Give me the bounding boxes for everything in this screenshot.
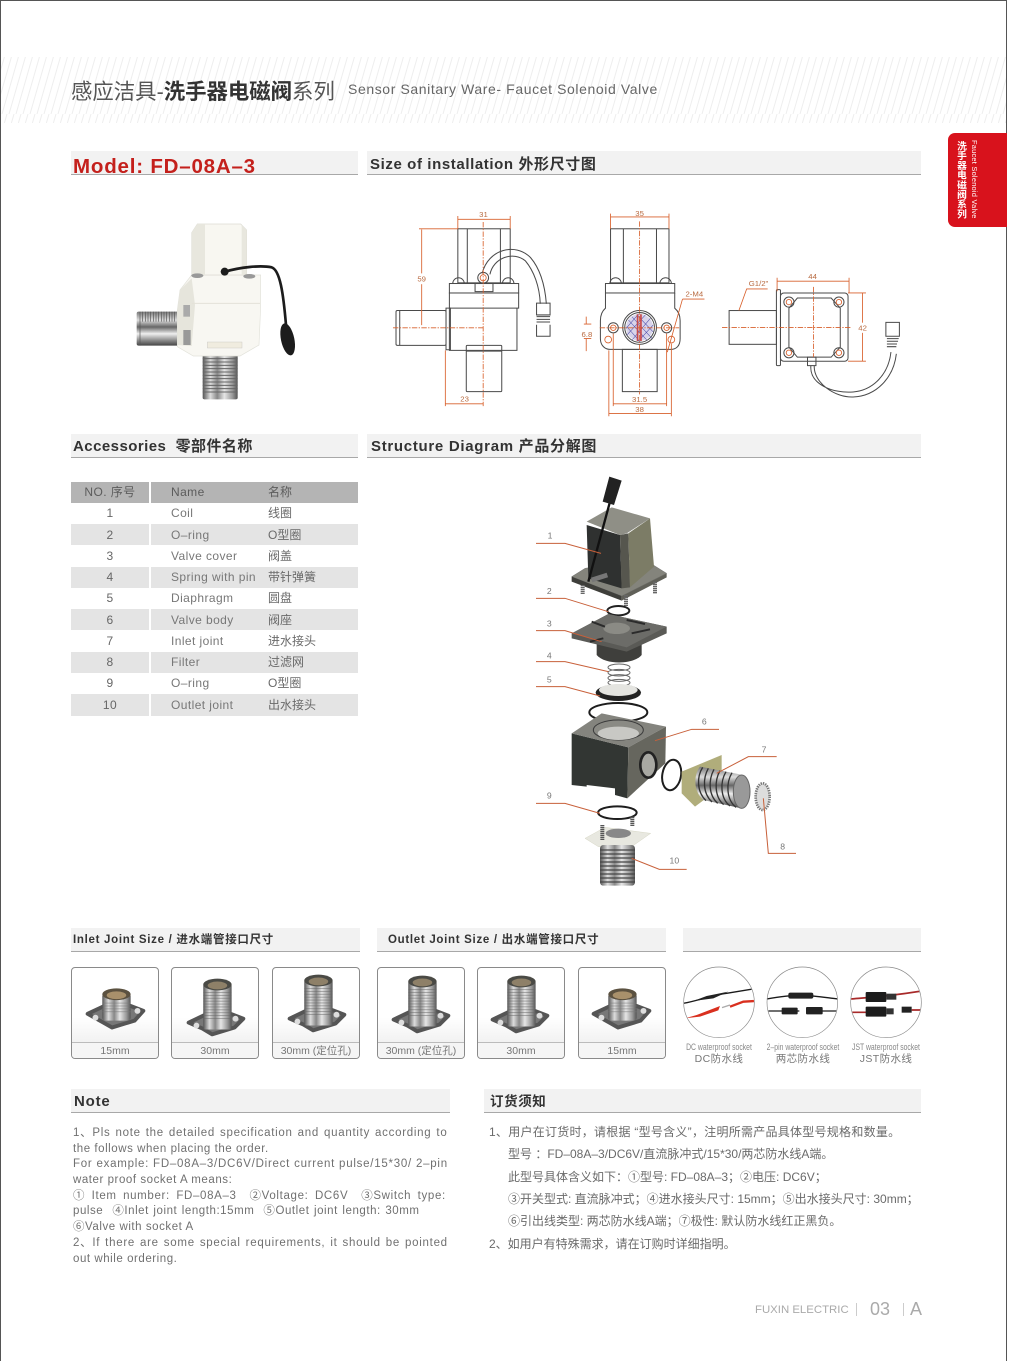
dimension labels [416, 209, 868, 414]
heading: size of installation [367, 151, 921, 175]
table column 1: 3 [106, 549, 114, 563]
tab Chinese text: 洗手器电磁阀系列 [955, 141, 966, 219]
text block: Chinese note [489, 1125, 919, 1251]
table column 3: O型圈 [268, 528, 301, 542]
caption: DC socket Chinese: DC防水线 [695, 1053, 743, 1065]
text block: English note [73, 1127, 448, 1265]
table column 3: O型圈 [268, 676, 301, 690]
heading: inlet joint size: Inlet Joint Size / 进水端管接口尺寸 [73, 934, 274, 946]
caption: JST Chinese: JST防水线 [860, 1053, 912, 1065]
table column 2: Coil [171, 506, 193, 520]
caption: 15mm [607, 1045, 637, 1057]
text block: English note: 1、Pls note the detailed specification and quantity according to [73, 1127, 447, 1139]
footer brand: FUXIN ELECTRIC [755, 1304, 849, 1316]
caption [273, 1042, 359, 1058]
title: 感应洁具-洗手器电磁阀系列 [71, 80, 335, 104]
table column 1: 4 [106, 570, 114, 584]
outlet joint [203, 350, 238, 399]
dimension labels: 2-M4 [685, 290, 704, 299]
dimension labels: 42 [858, 323, 867, 332]
caption: 30mm (定位孔) [386, 1045, 456, 1057]
caption: 30mm (定位孔) [281, 1045, 351, 1057]
leader lines [536, 543, 796, 869]
caption: 15mm [100, 1045, 130, 1057]
product photo [136, 224, 295, 400]
caption [478, 1042, 564, 1058]
part numbers: 9 [547, 791, 552, 801]
part numbers: 4 [547, 651, 552, 661]
text block: Chinese note: ③开关型式: 直流脉冲式；④进水接头尺寸: 15mm；⑤出水接头尺寸: 30mm； [508, 1192, 919, 1206]
part 7 inlet joint [682, 755, 750, 808]
table column 1: 2 [106, 528, 114, 542]
red side tab [948, 133, 1007, 227]
heading: outlet joint size [377, 928, 666, 952]
heading: empty waterproof bar [683, 928, 921, 952]
part 2 o-ring [607, 606, 629, 615]
upper o-ring [589, 703, 647, 722]
card: outlet 30mm [477, 967, 565, 1059]
table column 1: 1 [106, 506, 114, 520]
table column 2 [171, 485, 256, 712]
table column 2: Inlet joint [171, 634, 224, 648]
table column 3: 带针弹簧 [268, 570, 316, 584]
card: inlet 30mm [171, 967, 259, 1059]
JST socket circle [851, 967, 922, 1038]
dimension labels: 31.5 [632, 395, 647, 404]
heading: size of installation: Size of installation 外形尺寸图 [370, 156, 596, 173]
dimension labels: 59 [417, 274, 426, 283]
header hatched band [1, 57, 1006, 123]
heading: accessories: Accessories 零部件名称 [73, 438, 253, 455]
table column 3: 名称 [268, 485, 292, 499]
table column 2: Outlet joint [171, 698, 233, 712]
part 4 spring [608, 664, 630, 686]
text block: Chinese note: ⑥引出线类型: 两芯防水线A端；⑦极性: 默认防水线红正黑负。 [508, 1214, 841, 1228]
table column 3: 进水接头 [268, 634, 316, 648]
table column 1: 5 [106, 591, 114, 605]
table column 3: 阀座 [268, 612, 292, 626]
caption [579, 1042, 665, 1058]
heading: structure diagram: Structure Diagram 产品分解图 [371, 438, 597, 455]
model name: Model: FD–08A–3 [73, 155, 256, 178]
table column 2: Filter [171, 655, 200, 669]
text block: English note: the follows when placing the order. [73, 1143, 269, 1155]
table column 2: Name [171, 485, 205, 499]
part numbers: 10 [670, 856, 679, 866]
table column 2: O–ring [171, 528, 210, 542]
caption: JST socket: JST waterproof socket [852, 1042, 920, 1053]
cable and plug [221, 266, 298, 357]
part numbers: 5 [547, 674, 552, 684]
caption: DC socket: DC waterproof socket [686, 1042, 752, 1053]
part 9 o-ring [598, 806, 637, 819]
text block: Chinese note: 1、用户在订货时，请根据 “型号含义”，注明所需产品具体型号规格和数量。 [489, 1125, 900, 1139]
table column 1: 9 [106, 676, 114, 690]
caption [172, 1042, 258, 1058]
footer letter: A [910, 1299, 922, 1319]
dimension labels: 38 [635, 405, 644, 414]
part numbers [547, 530, 785, 866]
heading: ordering notice: 订货须知 [490, 1094, 546, 1109]
table column 3 [268, 485, 316, 712]
exploded structure diagram [536, 476, 796, 886]
caption: two-pin Chinese: 两芯防水线 [776, 1053, 830, 1065]
part numbers: 2 [547, 586, 552, 596]
part 5 diaphragm [596, 684, 641, 701]
table column 2: Valve body [171, 612, 234, 626]
front view drawing [600, 229, 680, 392]
dimension labels: G1/2" [749, 279, 769, 288]
text block: English note: For example: FD–08A–3/DC6V/Direct current pulse/15*30/ 2–pin [73, 1158, 448, 1170]
text block: English note: 2、If there are some special requirements, it should be pointed [73, 1237, 448, 1249]
table column 3: 阀盖 [268, 549, 292, 563]
table column 2: Spring with pin [171, 570, 256, 584]
table column 1: 7 [106, 634, 114, 648]
text block: English note: ⑥Valve with socket A [73, 1221, 194, 1233]
text block: English note: ① Item number: FD–08A–3 ②Voltage: DC6V ③Switch type: [73, 1190, 446, 1202]
caption: two-pin socket: 2–pin waterproof socket [767, 1042, 839, 1053]
text block: Chinese note: 2、如用户有特殊需求，请在订购时详细指明。 [489, 1237, 736, 1251]
table column 2: O–ring [171, 676, 210, 690]
heading: accessories [71, 434, 358, 458]
footer divider [903, 1303, 904, 1316]
caption [72, 1042, 158, 1058]
table column 3: 线圈 [268, 506, 292, 520]
table column 1: 6 [106, 612, 114, 626]
caption: 30mm [200, 1045, 230, 1057]
table header row [71, 482, 358, 503]
heading: ordering notice [484, 1089, 921, 1113]
dimension labels: 35 [635, 209, 644, 218]
heading: note [71, 1089, 450, 1113]
heading: outlet joint size: Outlet Joint Size / 出水端管接口尺寸 [388, 934, 599, 946]
footer divider [856, 1303, 857, 1316]
table column 3: 出水接头 [268, 698, 316, 712]
inlet joint [137, 312, 187, 346]
part numbers: 1 [548, 530, 553, 540]
table column 1: 8 [106, 655, 114, 669]
dimension labels: 31 [479, 210, 488, 219]
dimension labels: 23 [460, 394, 469, 403]
column separator [149, 482, 151, 716]
two-pin socket circle [767, 967, 838, 1038]
caption [378, 1042, 464, 1058]
technical drawings [392, 209, 900, 416]
table: accessories [71, 482, 358, 716]
DC socket circle [683, 967, 757, 1038]
part numbers: 8 [780, 842, 785, 852]
table column 2: Diaphragm [171, 591, 233, 605]
part 1 coil [572, 477, 667, 606]
heading: inlet joint size [71, 928, 360, 952]
part 3 valve cover [572, 614, 667, 662]
card: outlet 30mm locating hole [377, 967, 465, 1059]
table column 1: NO. 序号 [84, 485, 136, 499]
top view drawing [729, 290, 899, 397]
card: outlet 15mm [578, 967, 666, 1059]
caption: 30mm [506, 1045, 536, 1057]
card: inlet 30mm locating hole [272, 967, 360, 1059]
text block: English note: pulse ④Inlet joint length:15mm ⑤Outlet joint length: 30mm [73, 1205, 419, 1217]
waterproof socket photos [683, 966, 922, 1038]
table column 3: 圆盘 [268, 591, 292, 605]
part 6 valve body [572, 713, 666, 798]
table stripes [71, 524, 358, 545]
subtitle: Sensor Sanitary Ware- Faucet Solenoid Valve [348, 81, 658, 97]
text block: English note: water proof socket A means: [73, 1174, 232, 1186]
text block: Chinese note: 型号 ：FD–08A–3/DC6V/直流脉冲式/15*30/两芯防水线A端。 [508, 1147, 833, 1161]
part numbers: 3 [547, 619, 552, 629]
side view drawing [396, 229, 550, 392]
card: inlet 15mm [71, 967, 159, 1059]
tab English text: Faucet Solenoid Valve [970, 140, 979, 219]
footer page number: 03 [870, 1299, 890, 1319]
part 8 filter [756, 783, 770, 810]
heading: note: Note [74, 1093, 111, 1110]
dimension labels: 6.8 [581, 330, 592, 339]
part 10 outlet joint [585, 817, 651, 886]
text block: Chinese note: 此型号具体含义如下：①型号: FD–08A–3；②电压: DC6V； [508, 1170, 827, 1184]
white valve body [177, 275, 261, 356]
table column 3: 过滤网 [268, 655, 304, 669]
heading: model [71, 151, 358, 175]
heading: structure diagram [367, 434, 921, 458]
coil [192, 224, 247, 275]
part numbers: 7 [762, 745, 767, 755]
part numbers: 6 [702, 717, 707, 727]
dimension labels: 44 [808, 272, 818, 281]
inlet o-ring [660, 758, 684, 792]
table column 2: Valve cover [171, 549, 237, 563]
dimension lines [393, 214, 866, 416]
table column 1 [84, 485, 136, 712]
text block: English note: out while ordering. [73, 1253, 177, 1265]
table column 1: 10 [103, 698, 117, 712]
filter mesh [626, 314, 653, 342]
